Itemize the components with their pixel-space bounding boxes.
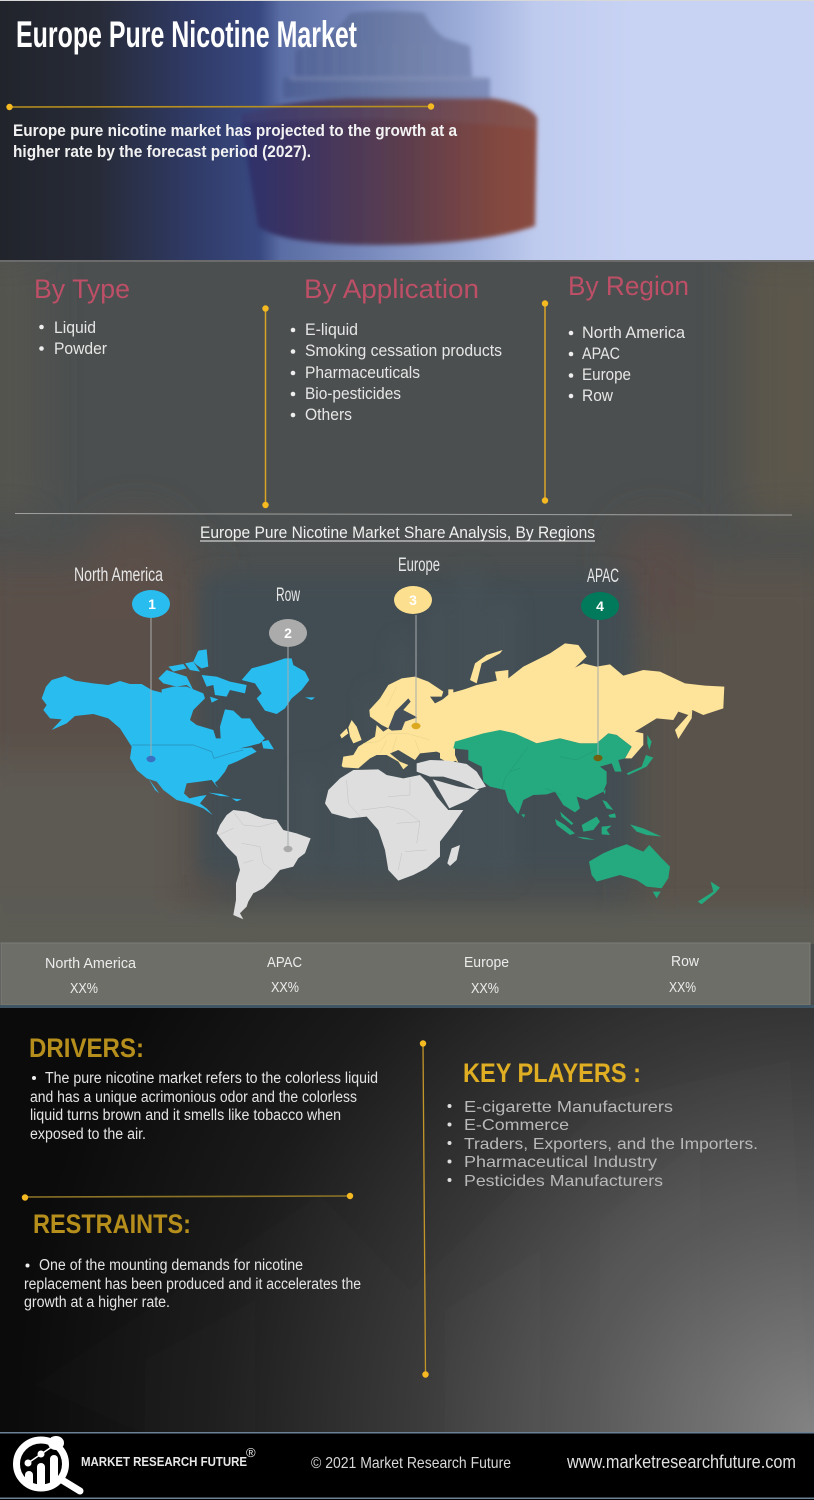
text: drivers: liquid turns brown and it smells like tobacco when <box>30 1107 341 1124</box>
block: key players <box>448 1058 758 1190</box>
text: drivers: and has a unique acrimonious odor and the colorless <box>30 1089 357 1106</box>
list: key players: Pharmaceutical Industry <box>464 1154 657 1171</box>
share: APAC: APAC <box>267 954 302 971</box>
pin: Europe: Europe <box>398 555 440 576</box>
list: by application: Smoking cessation products <box>305 341 502 360</box>
text: drivers: The pure nicotine market refers to the colorless liquid <box>45 1070 378 1087</box>
pin: North America: North America <box>74 565 163 586</box>
heading: by application: By Application <box>304 274 479 304</box>
list: by type <box>39 318 107 358</box>
heading: key players: KEY PLAYERS : <box>463 1058 641 1088</box>
share: Europe: Europe <box>464 954 509 971</box>
pin: APAC: 4 <box>596 598 604 614</box>
column: by region <box>568 271 689 405</box>
panel: segments and map background <box>0 250 814 960</box>
list: by application: Pharmaceuticals <box>305 363 420 382</box>
pin: North America: 1 <box>148 596 156 612</box>
intro text: Europe pure nicotine market has projected to the growth at a <box>13 122 458 140</box>
region: APAC <box>453 730 720 904</box>
share: North America: North America <box>45 955 137 972</box>
pin: Row: 2 <box>284 625 292 641</box>
block: drivers <box>29 1033 378 1143</box>
brand name: MARKET RESEARCH FUTURE <box>81 1455 247 1469</box>
share: North America <box>45 955 137 997</box>
pin: Row: Row <box>276 585 300 606</box>
list: by region: Row <box>582 386 614 405</box>
list: key players: E-cigarette Manufacturers <box>464 1099 673 1116</box>
list: by region <box>569 323 686 405</box>
region: North America <box>42 649 315 815</box>
share: North America: XX% <box>70 980 98 997</box>
divider: drivers and restraints <box>22 1193 353 1201</box>
panel: drivers, restraints and key players <box>0 1008 814 1432</box>
heading: by type: By Type <box>34 274 130 304</box>
text: drivers <box>30 1070 378 1143</box>
website: www.marketresearchfuture.com <box>566 1452 796 1472</box>
pin: Row <box>269 585 307 852</box>
pin: Europe: 3 <box>409 592 417 608</box>
footer <box>0 1432 814 1500</box>
icon: logo <box>16 1436 80 1491</box>
vertical divider 2 <box>542 300 548 504</box>
image: nicotine bottle <box>240 11 537 245</box>
vertical divider: key players <box>420 1040 429 1378</box>
block: restraints <box>24 1209 361 1311</box>
pin: APAC <box>581 566 619 761</box>
heading: drivers: DRIVERS: <box>29 1033 144 1063</box>
list: key players: Traders, Exporters, and the Importers. <box>464 1136 758 1153</box>
region: Row <box>217 760 486 919</box>
share: Europe: XX% <box>471 980 499 997</box>
text: restraints: One of the mounting demands for nicotine <box>39 1257 303 1274</box>
world map <box>42 643 724 919</box>
list: by region: Europe <box>582 365 631 384</box>
list: by type: Liquid <box>54 318 96 337</box>
heading: by region: By Region <box>568 271 689 301</box>
vertical divider 1 <box>262 305 269 508</box>
list: by application: Others <box>305 405 352 424</box>
column: by type <box>34 274 130 358</box>
list: by application <box>291 320 502 424</box>
pin: APAC: APAC <box>587 566 619 587</box>
panel: header <box>0 0 814 260</box>
share: APAC: XX% <box>271 979 299 996</box>
panel: header: higher rate by the forecast period (2027). <box>13 143 311 161</box>
pin: North America <box>74 565 170 762</box>
text: drivers: exposed to the air. <box>30 1126 146 1143</box>
list: by application: E-liquid <box>305 320 358 339</box>
region: Europe and Russia <box>340 643 724 769</box>
list: key players: Pesticides Manufacturers <box>464 1173 663 1190</box>
share: Row: XX% <box>669 979 696 996</box>
text: restraints: replacement has been produced and it accelerates the <box>24 1276 361 1293</box>
list: by type: Powder <box>54 339 107 358</box>
column: by application <box>291 274 502 424</box>
list: by region: APAC <box>582 344 620 363</box>
share: APAC <box>267 954 302 996</box>
heading: map section: Europe Pure Nicotine Market Share Analysis, By Regions <box>200 523 595 542</box>
copyright: © 2021 Market Research Future <box>311 1455 511 1472</box>
list: by region: North America <box>582 323 686 342</box>
registered mark: ® <box>246 1445 256 1460</box>
heading: restraints: RESTRAINTS: <box>33 1209 191 1239</box>
divider with dots <box>6 103 434 110</box>
share: Row: Row <box>671 953 699 970</box>
text: restraints: growth at a higher rate. <box>24 1294 170 1311</box>
list: key players <box>448 1099 758 1190</box>
share: Row <box>669 953 699 996</box>
share: Europe <box>464 954 509 997</box>
text: restraints <box>24 1257 361 1311</box>
list: by application: Bio-pesticides <box>305 384 401 403</box>
title: Europe Pure Nicotine Market <box>16 14 357 55</box>
list: key players: E-Commerce <box>464 1117 569 1134</box>
pin: Europe <box>394 555 440 729</box>
share table <box>0 943 814 1008</box>
